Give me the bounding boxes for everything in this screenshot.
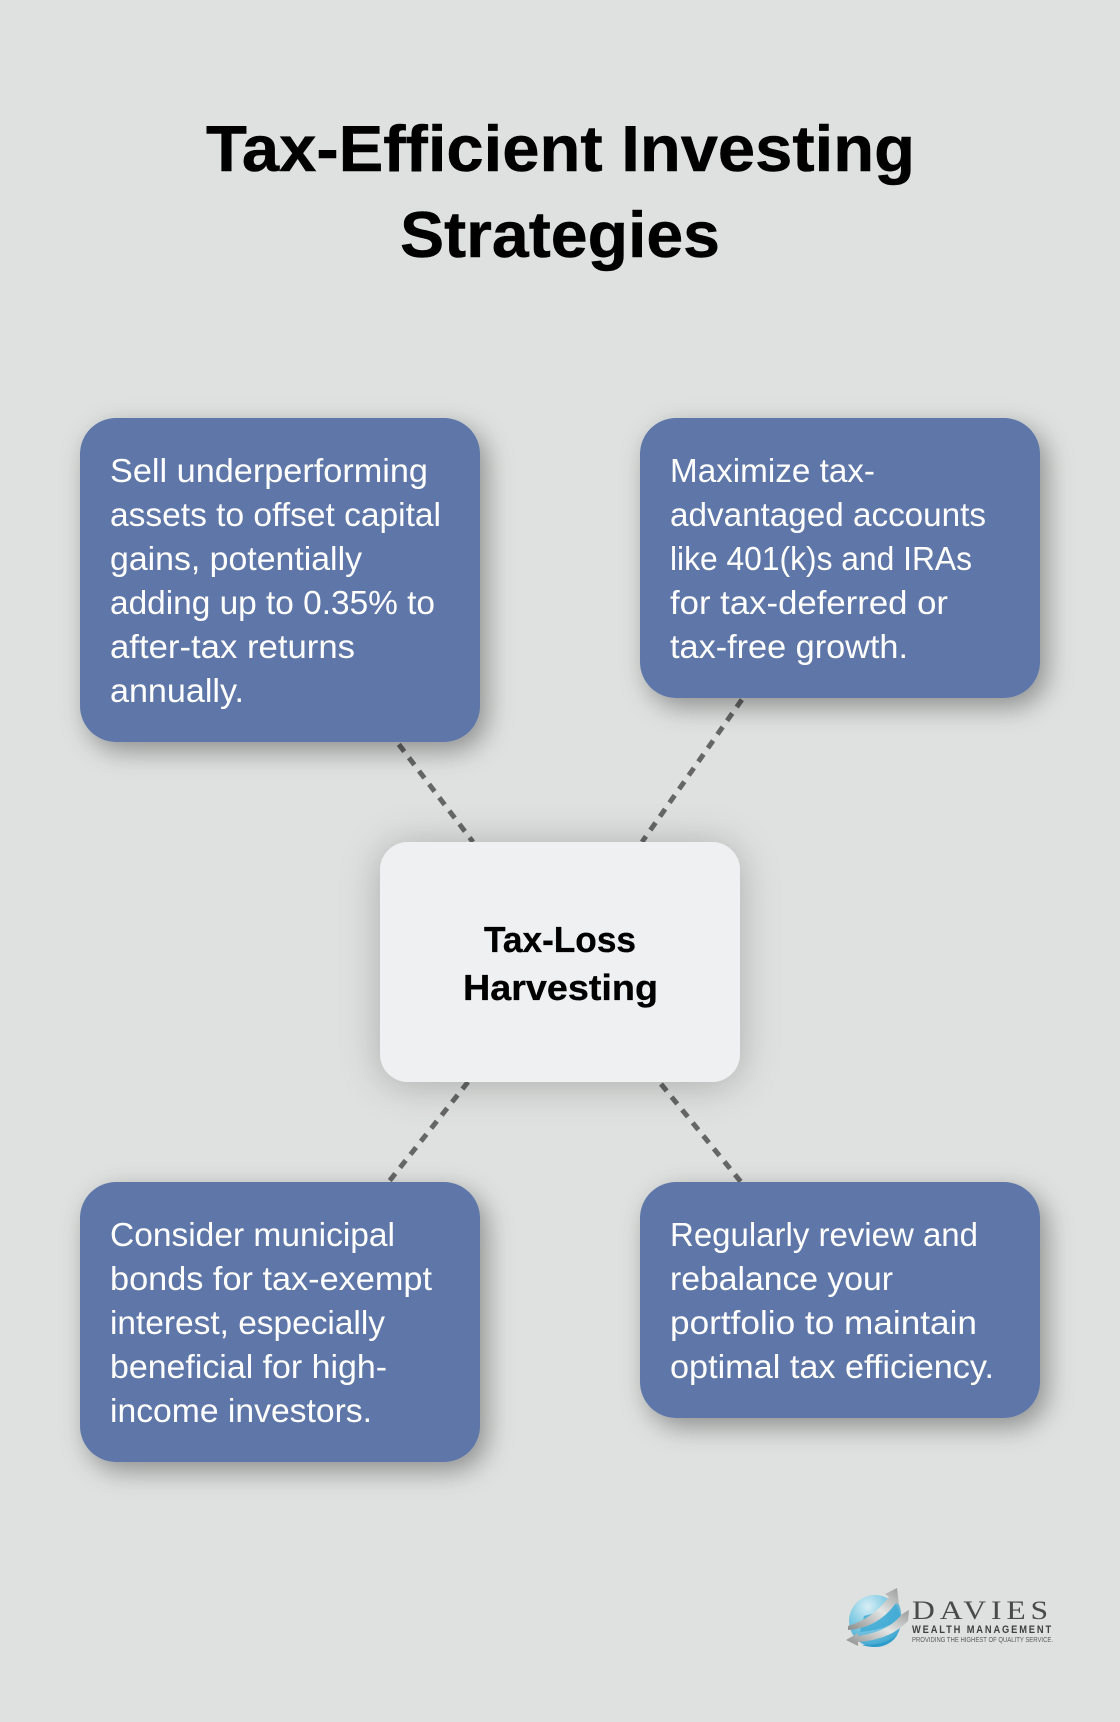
- panel: centre topic: [380, 842, 740, 1082]
- text: card 3 body: Consider municipal: [110, 1216, 395, 1253]
- text: logo wordmark: [912, 1596, 1053, 1644]
- icon: globe with arrows: [846, 1588, 909, 1647]
- title: [206, 112, 915, 271]
- panel: review and rebalance: [640, 1182, 1040, 1418]
- text: card 4 body: optimal tax efficiency.: [670, 1348, 994, 1385]
- text: centre label: Harvesting: [463, 967, 658, 1008]
- text: card 2 body: for tax-deferred or: [670, 584, 948, 621]
- text: card 2 body: advantaged accounts: [670, 496, 986, 533]
- text: card 3 body: [110, 1216, 432, 1429]
- panel: sell underperforming assets: [80, 418, 480, 742]
- text: card 4 body: portfolio to maintain: [670, 1304, 977, 1341]
- text: logo wordmark: PROVIDING THE HIGHEST OF QUALITY SERVICE.: [912, 1637, 1053, 1644]
- title: Tax-Efficient Investing: [206, 112, 915, 185]
- text: logo wordmark: WEALTH MANAGEMENT: [912, 1624, 1053, 1636]
- text: card 3 body: beneficial for high-: [110, 1348, 387, 1385]
- text: card 2 body: tax-free growth.: [670, 628, 908, 665]
- connector: centre to bottom-right card: [661, 1084, 741, 1182]
- text: centre label: Tax-Loss: [484, 919, 636, 960]
- title: Strategies: [400, 198, 720, 271]
- text: card 1 body: [110, 452, 441, 709]
- text: card 1 body: after-tax returns: [110, 628, 355, 665]
- text: card 4 body: [670, 1216, 994, 1385]
- text: card 2 body: like 401(k)s and IRAs: [670, 540, 972, 577]
- panel: maximize tax-advantaged accounts: [640, 418, 1040, 698]
- text: card 2 body: [670, 452, 986, 665]
- text: card 3 body: income investors.: [110, 1392, 372, 1429]
- text: card 1 body: adding up to 0.35% to: [110, 584, 435, 621]
- text: card 4 body: Regularly review and: [670, 1216, 978, 1253]
- text: card 1 body: assets to offset capital: [110, 496, 441, 533]
- connector: centre to bottom-left card: [387, 1082, 468, 1184]
- panel: municipal bonds: [80, 1182, 480, 1462]
- text: card 2 body: Maximize tax-: [670, 452, 875, 489]
- text: card 4 body: rebalance your: [670, 1260, 893, 1297]
- text: card 1 body: Sell underperforming: [110, 452, 428, 489]
- connector: top-right card to centre: [642, 698, 743, 842]
- text: card 3 body: interest, especially: [110, 1304, 385, 1341]
- text: centre label: [463, 919, 658, 1008]
- text: logo wordmark: DAVIES: [912, 1596, 1053, 1625]
- text: card 1 body: gains, potentially: [110, 540, 363, 577]
- text: card 3 body: bonds for tax-exempt: [110, 1260, 432, 1297]
- logo: Davies Wealth Management: [846, 1588, 1053, 1647]
- connector: top-left card to centre: [397, 742, 473, 842]
- text: card 1 body: annually.: [110, 672, 244, 709]
